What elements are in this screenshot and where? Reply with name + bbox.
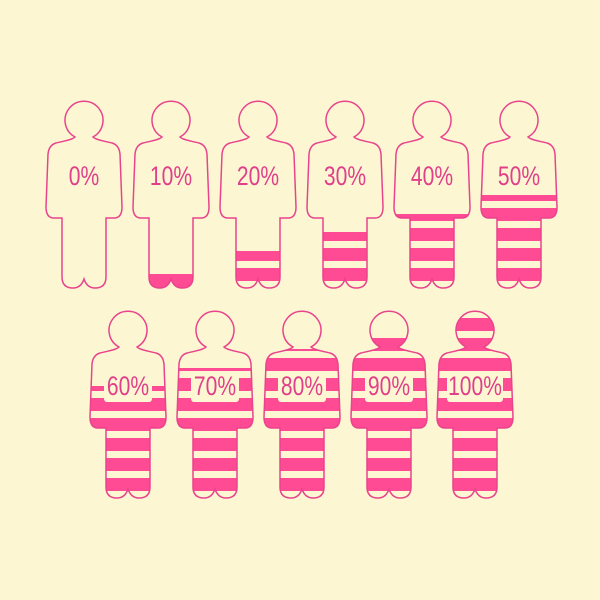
figure 60% xyxy=(89,310,167,499)
figure 70% xyxy=(176,310,254,499)
figure 40% xyxy=(393,100,471,289)
figure 30% xyxy=(306,100,384,289)
figure 0%: 0% xyxy=(69,162,99,192)
figure 10% xyxy=(132,100,210,289)
figure 10%: 10% xyxy=(150,162,192,192)
figure 20% xyxy=(219,100,297,289)
figure 20%: 20% xyxy=(237,162,279,192)
figure 80% xyxy=(263,310,341,499)
figure 100% xyxy=(436,310,514,499)
figure 0% xyxy=(46,101,122,288)
figure 60%: 60% xyxy=(107,372,149,402)
figure 50% xyxy=(480,100,558,289)
figure 30%: 30% xyxy=(324,162,366,192)
figure 100%: 100% xyxy=(448,372,502,402)
figure 90%: 90% xyxy=(368,372,410,402)
figure 70%: 70% xyxy=(194,372,236,402)
figure 50%: 50% xyxy=(498,162,540,192)
figure 80%: 80% xyxy=(281,372,323,402)
figure 40%: 40% xyxy=(411,162,453,192)
figure 90% xyxy=(350,310,428,499)
